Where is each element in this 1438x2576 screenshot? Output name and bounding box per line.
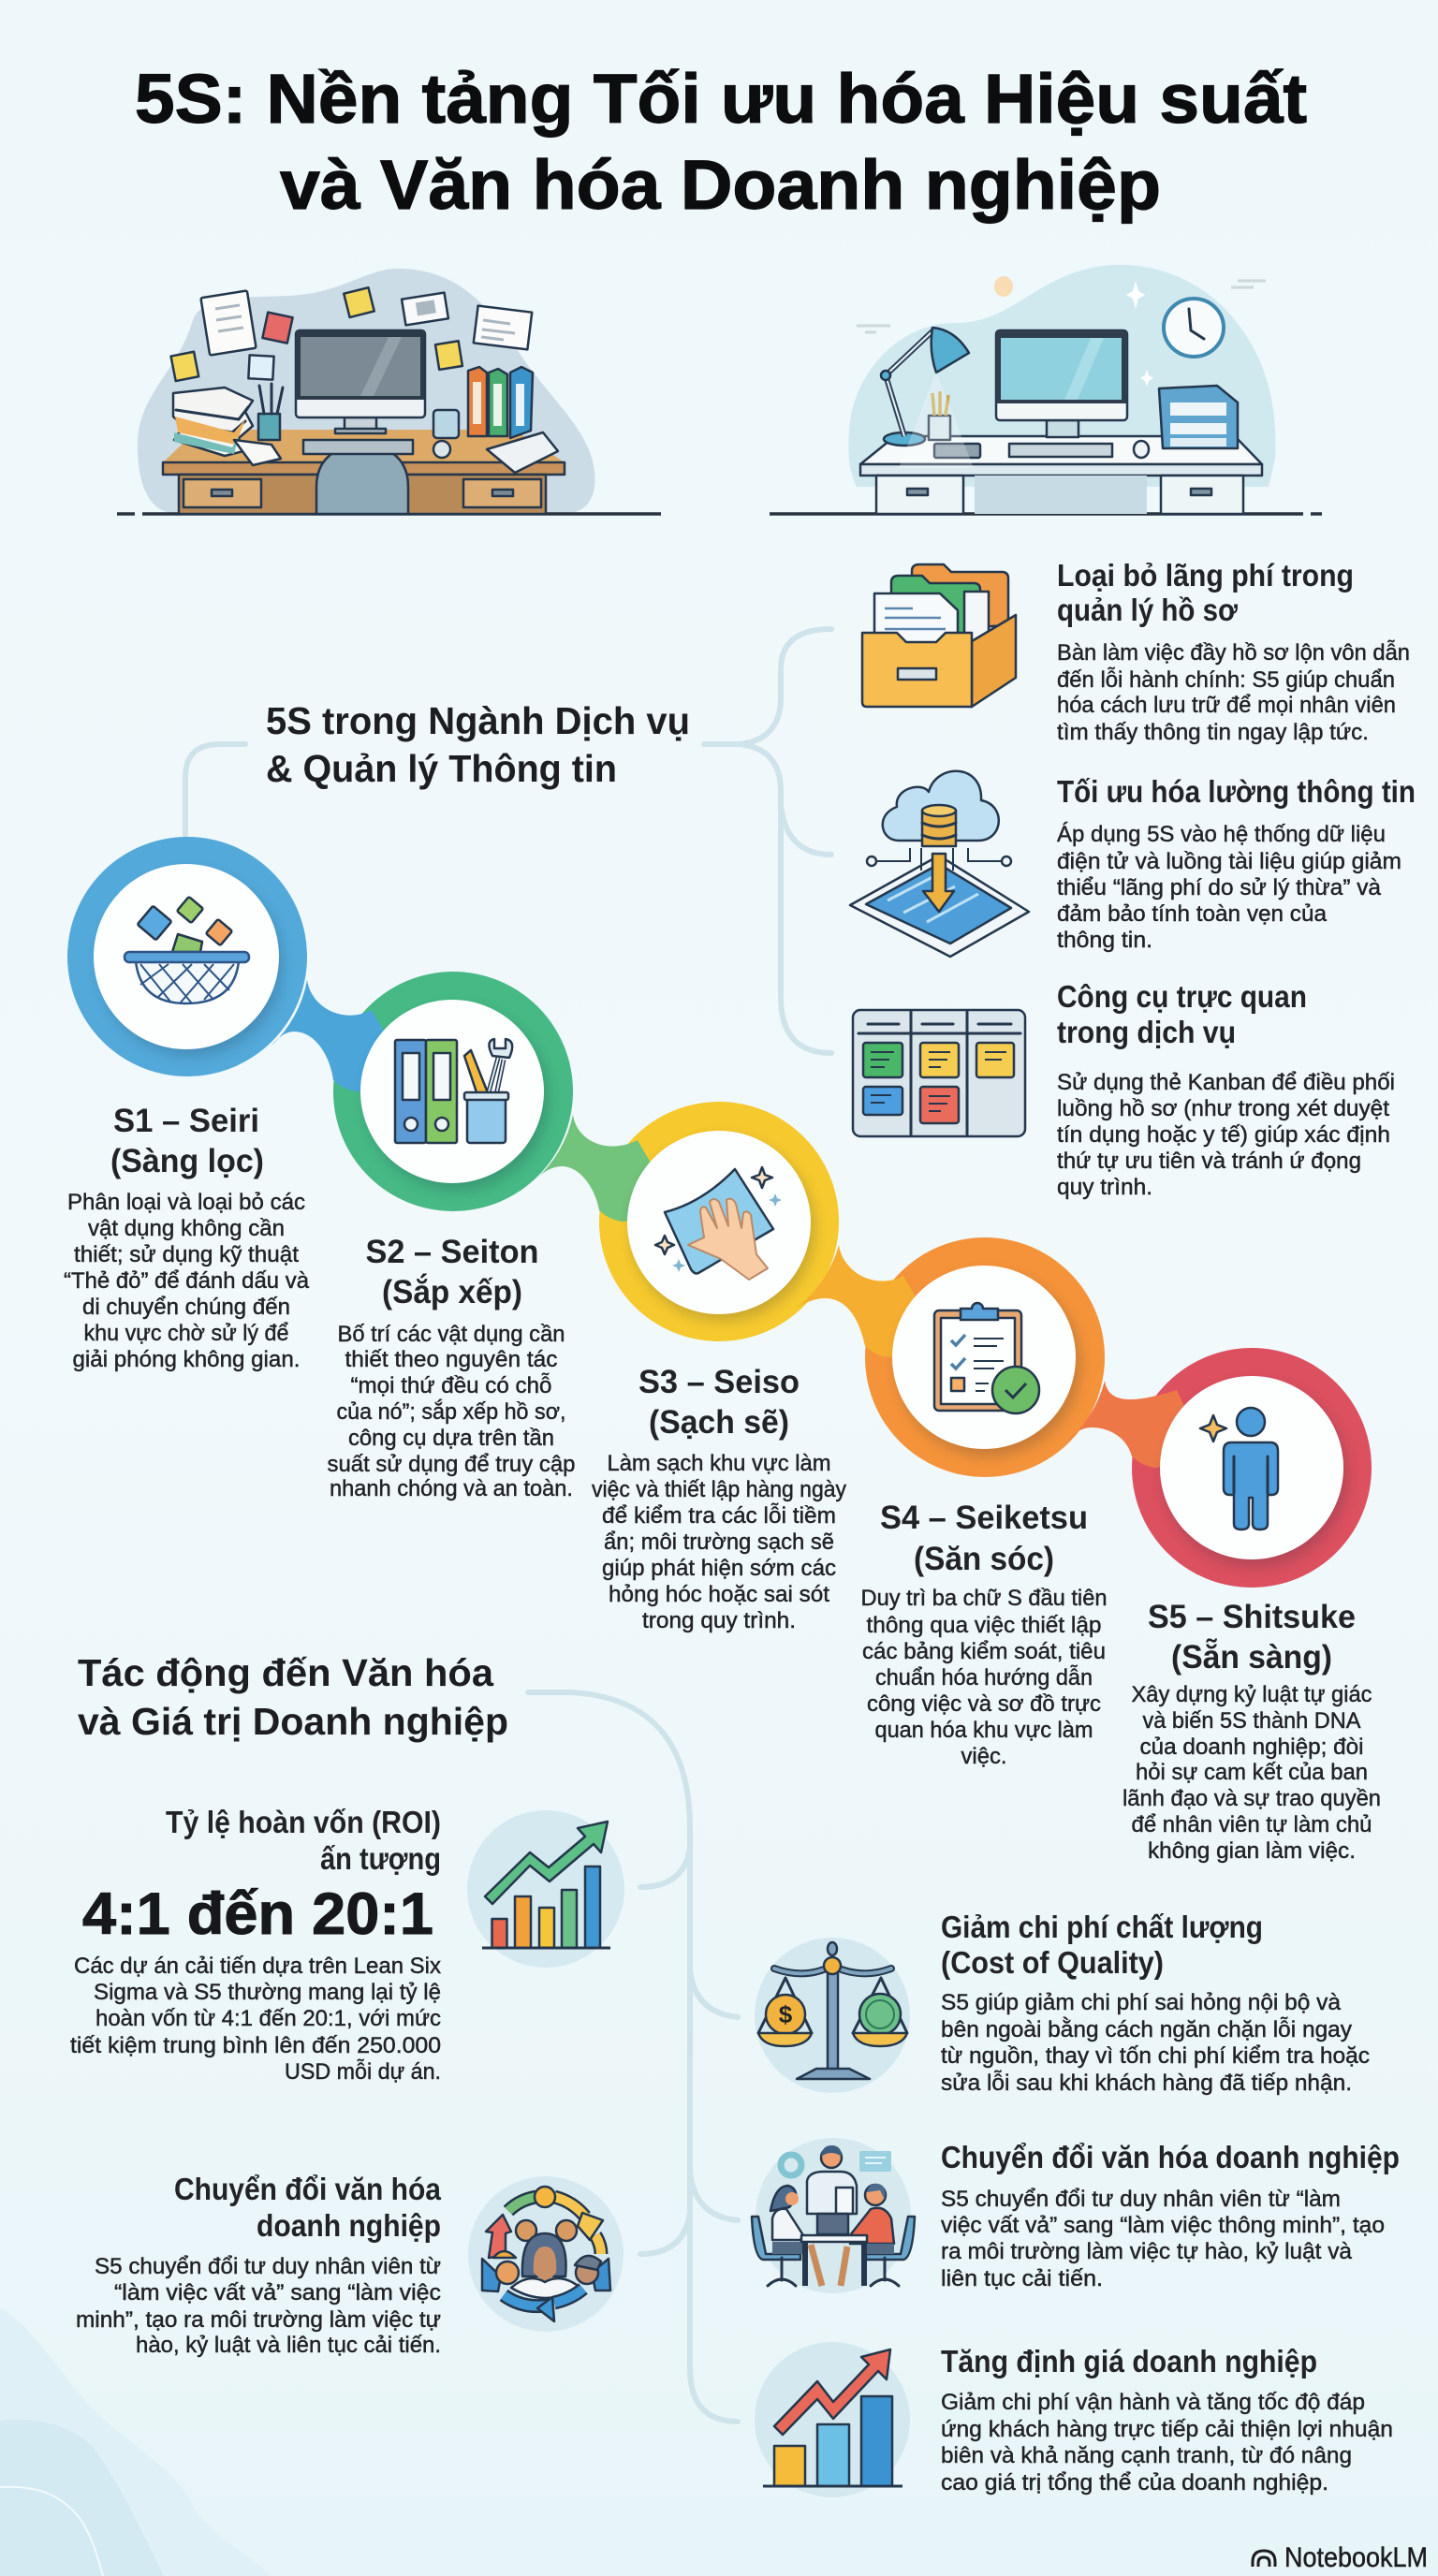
block: culture change right bbox=[941, 2140, 1400, 2291]
step: S2 Seiton: của nó”; sắp xếp hồ sơ, bbox=[337, 1399, 565, 1425]
icon: binders and tools bbox=[395, 1039, 512, 1143]
step: S1 Seiri: di chuyển chúng đến bbox=[82, 1295, 290, 1320]
step: S2 Seiton: “mọi thứ đều có chỗ bbox=[350, 1373, 552, 1398]
step: S2 Seiton bbox=[328, 1234, 575, 1501]
step: S1 Seiri: “Thẻ đỏ” để đánh dấu và bbox=[64, 1268, 310, 1294]
block: cost of quality bbox=[941, 1910, 1370, 2096]
block: culture change left: S5 chuyển đổi tư duy nhân viên từ bbox=[95, 2254, 441, 2279]
block: visual tools: quy trình. bbox=[1057, 1175, 1152, 1200]
step: S2 Seiton: nhanh chóng và an toàn. bbox=[330, 1476, 573, 1501]
step: S5 Shitsuke: Xây dựng kỷ luật tự giác bbox=[1131, 1682, 1372, 1707]
step: S2 Seiton: S2 – Seiton bbox=[365, 1234, 539, 1270]
step: S3 Seiso: hỏng hóc hoặc sai sót bbox=[609, 1582, 829, 1607]
block: culture change left: doanh nghiệp bbox=[257, 2208, 441, 2243]
step: S3 Seiso: ẩn; môi trường sạch sẽ bbox=[604, 1530, 834, 1555]
block: cost of quality: Giảm chi phí chất lượng bbox=[941, 1910, 1263, 1944]
step: S3 Seiso: (Sạch sẽ) bbox=[649, 1404, 789, 1441]
block: visual tools: thứ tự ưu tiên và tránh ứ đọng bbox=[1057, 1149, 1361, 1174]
illustration: messy desk bbox=[117, 269, 661, 514]
block: eliminate waste in records: Loại bỏ lãng phí trong bbox=[1057, 558, 1354, 593]
step: S1 Seiri: Phân loại và loại bỏ các bbox=[67, 1190, 305, 1215]
block: eliminate waste in records bbox=[1057, 558, 1410, 745]
block: culture change right: Chuyển đổi văn hóa doanh nghiệp bbox=[941, 2140, 1400, 2174]
step: S4 Seiketsu: thông qua việc thiết lập bbox=[867, 1613, 1101, 1638]
step: S4 Seiketsu: công việc và sơ đồ trực bbox=[867, 1691, 1101, 1717]
step: S3 Seiso: việc và thiết lập hàng ngày bbox=[592, 1477, 846, 1502]
step: S4 Seiketsu: Duy trì ba chữ S đầu tiên bbox=[861, 1586, 1107, 1611]
block: optimize information flow: điện tử và luồng tài liệu giúp giảm bbox=[1057, 849, 1401, 874]
step: S4 Seiketsu: S4 – Seiketsu bbox=[880, 1500, 1088, 1536]
block: valuation: ứng khách hàng trực tiếp cải thiện lợi nhuận bbox=[941, 2417, 1393, 2442]
title: và Văn hóa Doanh nghiệp bbox=[280, 146, 1161, 224]
step: S3 Seiso: để kiểm tra các lỗi tiềm bbox=[602, 1503, 836, 1529]
block: visual tools: trong dịch vụ bbox=[1057, 1015, 1236, 1049]
step: S5 Shitsuke: để nhân viên tự làm chủ bbox=[1131, 1812, 1372, 1837]
step: S3 Seiso: trong quy trình. bbox=[642, 1608, 796, 1633]
illustration: tidy desk bbox=[770, 265, 1322, 514]
block: cost of quality: bên ngoài bằng cách ngăn chặn lỗi ngay bbox=[941, 2017, 1352, 2042]
step: S3 Seiso: Làm sạch khu vực làm bbox=[607, 1451, 831, 1476]
icon: scales: $ bbox=[779, 2000, 793, 2028]
block: valuation: Giảm chi phí vận hành và tăng tốc độ đáp bbox=[941, 2390, 1365, 2415]
block: ROI: Sigma và S5 thường mang lại tỷ lệ bbox=[94, 1980, 441, 2005]
chain: five S rings bbox=[67, 837, 1372, 1588]
step: S5 Shitsuke: lãnh đạo và sự trao quyền bbox=[1123, 1786, 1381, 1811]
step: S4 Seiketsu: (Săn sóc) bbox=[914, 1541, 1054, 1577]
block: cost of quality: S5 giúp giảm chi phí sai hỏng nội bộ và bbox=[941, 1990, 1342, 2015]
step: S4 Seiketsu: việc. bbox=[961, 1744, 1007, 1769]
block: valuation: Tăng định giá doanh nghiệp bbox=[941, 2344, 1317, 2378]
block: culture change left: “làm việc vất vả” sang “làm việc bbox=[114, 2280, 441, 2305]
title bbox=[135, 60, 1307, 224]
block: culture change right: liên tục cải tiến. bbox=[941, 2266, 1103, 2291]
icon: cloud data bbox=[850, 771, 1029, 957]
icon: person bbox=[1200, 1408, 1278, 1530]
heading: 5S in services bbox=[266, 699, 690, 790]
big number: ROI range: 4:1 đến 20:1 bbox=[82, 1881, 433, 1947]
block: culture change left bbox=[76, 2172, 442, 2358]
block: ROI: Các dự án cải tiến dựa trên Lean Six bbox=[74, 1954, 441, 1979]
block: culture change left: minh”, tạo ra môi trường làm việc tự bbox=[76, 2307, 441, 2333]
icon: ROI chart bbox=[467, 1810, 624, 1968]
heading: 5S in services: & Quản lý Thông tin bbox=[266, 747, 617, 790]
step: S1 Seiri: giải phóng không gian. bbox=[73, 1347, 300, 1372]
block: culture change left: Chuyển đổi văn hóa bbox=[174, 2172, 442, 2206]
step: S2 Seiton: Bố trí các vật dụng cần bbox=[337, 1322, 565, 1347]
block: optimize information flow: Áp dụng 5S vào hệ thống dữ liệu bbox=[1057, 822, 1386, 847]
step: S1 Seiri: thiết; sử dụng kỹ thuật bbox=[74, 1242, 299, 1267]
block: valuation bbox=[941, 2344, 1393, 2496]
block: ROI bbox=[70, 1805, 441, 2085]
step: S2 Seiton: công cụ dựa trên tần bbox=[348, 1426, 554, 1451]
step: S5 Shitsuke: (Sẵn sàng) bbox=[1171, 1638, 1332, 1676]
block: visual tools: luồng hồ sơ (như trong xét duyệt bbox=[1057, 1096, 1389, 1121]
heading: impact on culture and value: và Giá trị Doanh nghiệp bbox=[78, 1700, 508, 1743]
block: culture change right: ra môi trường làm việc tự hào, kỷ luật và bbox=[941, 2239, 1353, 2264]
step: S3 Seiso: giúp phát hiện sớm các bbox=[602, 1556, 836, 1581]
step: S2 Seiton: thiết theo nguyên tác bbox=[345, 1347, 558, 1372]
icon: cleaning hand bbox=[655, 1167, 782, 1280]
step: S1 Seiri bbox=[64, 1103, 310, 1372]
icon: valuation chart bbox=[755, 2342, 910, 2497]
step: S2 Seiton: suất sử dụng để truy cập bbox=[328, 1452, 575, 1477]
step: S1 Seiri: (Sàng lọc) bbox=[110, 1143, 264, 1179]
block: eliminate waste in records: tìm thấy thông tin ngay lập tức. bbox=[1057, 720, 1369, 745]
block: ROI: tiết kiệm trung bình lên đến 250.000 bbox=[70, 2033, 441, 2058]
block: eliminate waste in records: đến lỗi hành chính: S5 giúp chuẩn bbox=[1057, 667, 1395, 693]
step: S5 Shitsuke: hỏi sự cam kết của ban bbox=[1136, 1760, 1368, 1785]
heading: 5S in services: 5S trong Ngành Dịch vụ bbox=[266, 699, 690, 742]
block: optimize information flow bbox=[1057, 774, 1416, 953]
title: 5S: Nền tảng Tối ưu hóa Hiệu suất bbox=[135, 60, 1307, 138]
block: cost of quality: sửa lỗi sau khi khách hàng đã tiếp nhận. bbox=[941, 2071, 1352, 2096]
block: optimize information flow: thông tin. bbox=[1057, 928, 1152, 953]
block: culture change right: S5 chuyển đổi tư duy nhân viên từ “làm bbox=[941, 2187, 1341, 2212]
connector: services branch bbox=[185, 629, 831, 1053]
step: S5 Shitsuke: S5 – Shitsuke bbox=[1148, 1599, 1356, 1635]
icon: team meeting bbox=[752, 2138, 915, 2293]
step: S4 Seiketsu: các bảng kiểm soát, tiêu bbox=[862, 1639, 1106, 1664]
block: ROI: hoàn vốn từ 4:1 đến 20:1, với mức bbox=[95, 2006, 441, 2031]
block: valuation: cao giá trị tổng thể của doanh nghiệp. bbox=[941, 2470, 1328, 2496]
step: S1 Seiri: khu vực chờ sử lý để bbox=[84, 1321, 288, 1346]
step: S3 Seiso bbox=[592, 1364, 846, 1633]
step: S1 Seiri: S1 – Seiri bbox=[113, 1103, 259, 1139]
step: S4 Seiketsu: chuẩn hóa hướng dẫn bbox=[875, 1665, 1093, 1690]
block: visual tools: tín dụng hoặc y tế) giúp xác định bbox=[1057, 1122, 1390, 1148]
block: visual tools: Công cụ trực quan bbox=[1057, 979, 1307, 1014]
block: ROI: ấn tượng bbox=[320, 1841, 441, 1876]
block: optimize information flow: đảm bảo tính toàn vẹn của bbox=[1057, 901, 1328, 927]
step: S1 Seiri: vật dụng không cần bbox=[88, 1216, 285, 1241]
block: eliminate waste in records: Bàn làm việc đầy hồ sơ lộn vôn dẫn bbox=[1057, 640, 1410, 666]
step: S3 Seiso: S3 – Seiso bbox=[638, 1364, 800, 1400]
block: ROI: USD mỗi dự án. bbox=[285, 2059, 441, 2085]
block: valuation: biên và khả năng cạnh tranh, từ đó nâng bbox=[941, 2443, 1352, 2468]
icon: checklist bbox=[934, 1303, 1039, 1413]
step: S5 Shitsuke: của doanh nghiệp; đòi bbox=[1140, 1734, 1363, 1760]
step: S5 Shitsuke: và biến 5S thành DNA bbox=[1142, 1708, 1361, 1734]
block: visual tools bbox=[1057, 979, 1395, 1200]
icon: culture cycle bbox=[468, 2176, 624, 2332]
step: S5 Shitsuke: không gian làm việc. bbox=[1148, 1838, 1356, 1864]
step: S5 Shitsuke bbox=[1123, 1599, 1381, 1864]
block: culture change right: việc vất vả” sang “làm việc thông minh”, tạo bbox=[941, 2213, 1385, 2238]
step: S2 Seiton: (Sắp xếp) bbox=[382, 1273, 522, 1310]
icon: scales bbox=[755, 1938, 910, 2093]
step: S4 Seiketsu bbox=[861, 1500, 1107, 1769]
heading: impact on culture and value bbox=[78, 1651, 508, 1743]
block: eliminate waste in records: quản lý hồ sơ bbox=[1057, 593, 1238, 627]
connector: impact branch bbox=[528, 1692, 738, 2422]
block: ROI: Tỷ lệ hoàn vốn (ROI) bbox=[166, 1805, 441, 1839]
icon: sieve bbox=[125, 897, 249, 1003]
heading: impact on culture and value: Tác động đến Văn hóa bbox=[78, 1651, 494, 1694]
block: culture change left: hào, kỷ luật và liên tục cải tiến. bbox=[136, 2333, 441, 2358]
block: visual tools: Sử dụng thẻ Kanban để điều phối bbox=[1057, 1070, 1395, 1095]
block: eliminate waste in records: hóa cách lưu trữ để mọi nhân viên bbox=[1057, 693, 1396, 718]
block: cost of quality: (Cost of Quality) bbox=[941, 1945, 1164, 1980]
block: cost of quality: từ nguồn, thay vì tốn chi phí kiểm tra hoặc bbox=[941, 2043, 1370, 2069]
icon: file box bbox=[862, 564, 1016, 707]
step: S4 Seiketsu: quan hóa khu vực làm bbox=[874, 1718, 1093, 1743]
block: optimize information flow: thiểu “lãng phí do sử lý thừa” và bbox=[1057, 875, 1382, 900]
icon: kanban board bbox=[853, 1010, 1025, 1136]
